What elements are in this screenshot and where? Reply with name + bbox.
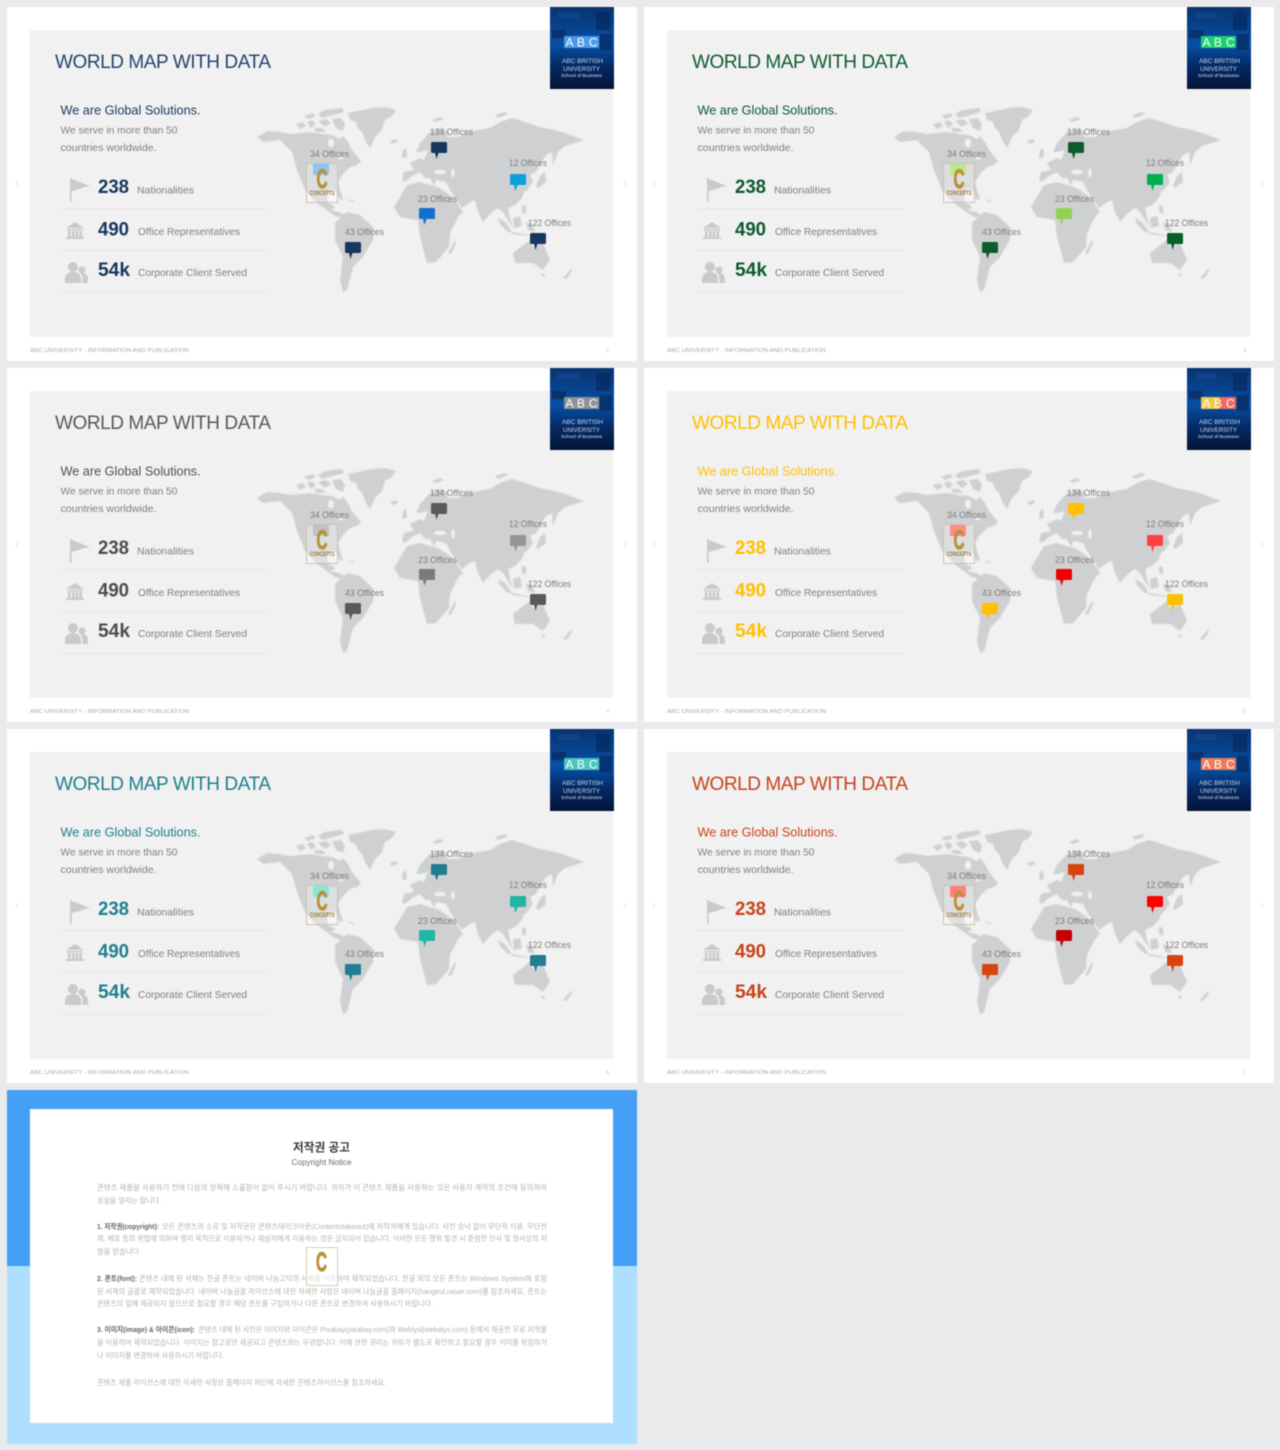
world map: [894, 468, 1221, 653]
description: [60, 486, 178, 515]
stat: nationalities: Nationalities: [137, 546, 194, 558]
stat: office representatives: Office Representatives: [775, 948, 877, 960]
office markers: 34 Offices: [947, 510, 986, 521]
office markers: 12 Offices: [1146, 519, 1184, 530]
stats list: [697, 177, 905, 293]
office markers: 43 Offices: [982, 227, 1021, 238]
stat: nationalities: [98, 899, 194, 920]
description: [60, 846, 178, 876]
cover thumbnail: ABC BRITISH: [1199, 59, 1240, 65]
office markers: 23 Offices: [418, 194, 457, 205]
stat: corporate clients: [98, 260, 247, 281]
stats list: [697, 538, 905, 654]
office markers: 134 Offices: [1067, 127, 1110, 138]
stat: nationalities: 238: [98, 538, 129, 559]
footer: 4: [606, 709, 610, 715]
stat: nationalities: [735, 177, 831, 198]
stat: office representatives: 490: [98, 942, 129, 962]
office markers: 134 Offices: [1067, 849, 1110, 860]
world map: [257, 107, 584, 292]
stat: nationalities: 238: [98, 177, 129, 198]
title: WORLD MAP WITH DATA: [55, 52, 271, 73]
stat: corporate clients: Corporate Client Served: [138, 989, 247, 1001]
watermark: C: [954, 164, 964, 194]
watermark: [306, 1247, 338, 1286]
watermark: CONCEPTS: [310, 191, 334, 197]
office markers: 34 Offices: [310, 871, 349, 882]
copyright heading: Copyright Notice: [292, 1157, 352, 1167]
office markers: 122 Offices: [528, 218, 571, 229]
stat: corporate clients: 54k: [98, 260, 130, 281]
stat: office representatives: [98, 580, 240, 602]
office markers: 134 Offices: [1067, 488, 1110, 499]
footer: 5: [1243, 709, 1246, 715]
footer: [30, 709, 610, 715]
office markers: [947, 127, 1208, 259]
description: countries worldwide.: [60, 503, 156, 515]
office markers: [310, 849, 571, 981]
office markers: 12 Offices: [1146, 880, 1184, 891]
panel: slide 2 green theme: [644, 7, 1274, 361]
stat: nationalities: 238: [735, 899, 766, 920]
office markers: 134 Offices: [430, 488, 473, 499]
stat: office representatives: Office Representatives: [775, 587, 877, 599]
office markers: [310, 488, 571, 620]
cover thumbnail: UNIVERSITY: [1200, 428, 1237, 434]
description: [698, 124, 815, 154]
copyright body text: 재, 배포 등의 위법에 의하여 영리 목적으로 이용하거나 제삼자에게 이용하는 것은 금지되어 있습니다. 이러한 모든 행위 발견 시 준엄한 민사 및 형사상의 처: [97, 1233, 547, 1243]
world map: [257, 468, 584, 653]
cover thumbnail: A B C: [1202, 36, 1235, 50]
office markers: 122 Offices: [528, 940, 571, 951]
subtitle: We are Global Solutions.: [698, 102, 838, 118]
cover thumbnail: A B C: [1202, 758, 1235, 772]
stat: corporate clients: Corporate Client Served: [775, 267, 884, 279]
office markers: 12 Offices: [509, 519, 547, 530]
watermark: CONCEPTS: [310, 913, 334, 919]
stat: nationalities: Nationalities: [137, 906, 194, 918]
cover thumbnail: [550, 368, 614, 450]
stat: corporate clients: 54k: [735, 260, 767, 281]
stats list: [697, 899, 905, 1015]
description: We serve in more than 50: [698, 124, 815, 136]
footer: 7: [1243, 1070, 1246, 1076]
panel: slide 4 yellow theme: [644, 368, 1274, 722]
copyright body text: 콘텐츠 내에 된 서체는 한글 폰트는 네이버 나눔고딕의 서체를 이용하여 제작되었습니다. 한글 외의 모든 폰트는 Windows System에 포함: [139, 1273, 547, 1283]
watermark: C: [316, 1247, 327, 1277]
cover thumbnail: [1187, 729, 1251, 811]
stats list: [60, 538, 268, 654]
cover thumbnail: School of Business: [1198, 795, 1240, 800]
cover thumbnail: School of Business: [561, 434, 603, 439]
stat: office representatives: 490: [735, 580, 766, 602]
description: We serve in more than 50: [60, 846, 178, 858]
cover thumbnail: ABC BRITISH: [562, 420, 603, 426]
stat: office representatives: 490: [98, 580, 129, 602]
watermark: C: [316, 525, 328, 555]
office markers: 34 Offices: [310, 510, 349, 521]
footer: ABC UNIVERSITY - INFORMATION AND PUBLICATION: [30, 348, 189, 354]
title: WORLD MAP WITH DATA: [692, 413, 908, 434]
title: WORLD MAP WITH DATA: [692, 52, 908, 73]
watermark: [306, 524, 338, 564]
footer: ABC UNIVERSITY - INFORMATION AND PUBLICATION: [30, 709, 189, 715]
footer: 6: [606, 1070, 609, 1076]
icon: people: [702, 262, 725, 283]
copyright body text: 3. 이미지(image) & 아이콘(icon):: [97, 1324, 195, 1334]
world map: [894, 107, 1221, 292]
icon: people: [702, 984, 725, 1005]
copyright body text: 모든 콘텐츠의 소유 및 저작권은 콘텐츠테이크아웃(Contentstakeout)에 저작자에게 있습니다. 사전 승낙 없이 무단적 이용, 무단전: [162, 1221, 547, 1231]
copyright body text: 된 서체의 글꼴로 제작되었습니다. 네이버 나눔글꼴 라이선스에 대한 자세한 사항은 네이버 나눔글꼴 홈페이지(hangeul.naver.com)를 참조하세요. 폰트는: [97, 1286, 547, 1296]
subtitle: We are Global Solutions.: [60, 464, 200, 478]
office markers: [310, 127, 571, 259]
description: We serve in more than 50: [60, 124, 178, 136]
subtitle: We are Global Solutions.: [698, 464, 838, 478]
cover thumbnail: School of Business: [1198, 434, 1240, 439]
office markers: 23 Offices: [1055, 916, 1094, 927]
stat: office representatives: [735, 942, 877, 962]
watermark: CONCEPTS: [946, 913, 972, 919]
title: WORLD MAP WITH DATA: [55, 774, 271, 795]
office markers: 12 Offices: [509, 880, 547, 891]
stat: corporate clients: 54k: [98, 621, 130, 642]
watermark: C: [954, 525, 964, 555]
description: We serve in more than 50: [698, 846, 815, 858]
footer: 3: [1243, 348, 1246, 354]
icon: people: [65, 623, 88, 644]
icon: building: [703, 583, 721, 600]
cover thumbnail: A B C: [566, 396, 598, 410]
footer: [667, 348, 1246, 354]
cover thumbnail: A B C: [1202, 396, 1235, 410]
footer: [30, 348, 609, 354]
cover thumbnail: [550, 729, 614, 811]
stat: corporate clients: Corporate Client Served: [138, 628, 247, 640]
office markers: 134 Offices: [430, 849, 473, 860]
office markers: 134 Offices: [430, 127, 473, 138]
icon: flag: [707, 900, 727, 924]
office markers: 43 Offices: [345, 227, 384, 238]
icon: people: [65, 262, 88, 283]
cover thumbnail: A B C: [566, 36, 598, 50]
office markers: 43 Offices: [345, 588, 384, 599]
footer: ABC UNIVERSITY - INFORMATION AND PUBLICATION: [667, 709, 826, 715]
icon: building: [66, 222, 84, 239]
office markers: 23 Offices: [1055, 555, 1094, 566]
description: countries worldwide.: [698, 864, 794, 876]
stat: office representatives: [735, 580, 877, 602]
icon: building: [703, 944, 721, 961]
title: WORLD MAP WITH DATA: [692, 774, 908, 795]
description: countries worldwide.: [60, 864, 156, 876]
copyright heading: 저작권 공고: [293, 1140, 350, 1154]
cover thumbnail: School of Business: [561, 795, 603, 800]
office markers: 122 Offices: [1165, 940, 1208, 951]
icon: building: [703, 222, 721, 239]
copyright body text: 콘텐츠 제품 라이선스에 대한 자세한 사항은 홈페이지 하단에 자세한 콘텐츠라이선스를 참조하세요.: [97, 1377, 386, 1387]
stat: nationalities: [735, 538, 831, 559]
stat: corporate clients: [735, 982, 884, 1003]
cover thumbnail: ABC BRITISH: [1199, 420, 1240, 426]
office markers: 122 Offices: [1165, 218, 1208, 229]
stat: office representatives: [98, 220, 240, 240]
stat: nationalities: [98, 177, 194, 198]
stat: nationalities: [735, 899, 831, 920]
copyright body text: 1. 저작권(copyright):: [97, 1221, 159, 1231]
copyright body text: 을 이용하여 제작되었습니다. 이미지는 참고로만 제공되고 콘텐츠와는 무관합니다. 이에 관한 권리는 귀하가 별도로 확인하고 필요할 경우 이미를 위임하거: [97, 1337, 547, 1347]
icon: people: [702, 623, 725, 644]
stat: office representatives: Office Representatives: [138, 226, 240, 238]
world map: [257, 829, 584, 1014]
office markers: 23 Offices: [418, 916, 457, 927]
copyright body text: 콘텐츠의 일에 제공되지 않으므로 필요할 경우 해당 폰트를 구입하거나 다른 폰트로 변경하여 사용하시기 바랍니다.: [97, 1298, 433, 1308]
footer: [667, 709, 1246, 715]
copyright body text: 2. 폰트(font):: [97, 1274, 137, 1283]
stat: nationalities: Nationalities: [774, 546, 831, 558]
stats list: [60, 177, 268, 293]
cover thumbnail: School of Business: [561, 73, 603, 78]
stat: nationalities: 238: [735, 177, 766, 198]
footer: [667, 1070, 1246, 1076]
office markers: 12 Offices: [1146, 158, 1184, 169]
panel: slide 6 red-orange theme: [644, 729, 1274, 1083]
world map: [894, 829, 1221, 1014]
subtitle: We are Global Solutions.: [60, 102, 200, 118]
panel: copyright notice slide: [7, 1090, 637, 1444]
office markers: 122 Offices: [1165, 579, 1208, 590]
panel: slide 5 teal theme: [7, 729, 637, 1083]
cover thumbnail: UNIVERSITY: [563, 428, 600, 434]
footer: [30, 1070, 609, 1076]
stat: corporate clients: [735, 621, 884, 642]
stat: office representatives: 490: [735, 942, 766, 962]
copyright body text: [97, 1182, 547, 1387]
office markers: [947, 849, 1208, 981]
title: WORLD MAP WITH DATA: [55, 413, 271, 434]
footer: ABC UNIVERSITY - INFORMATION AND PUBLICATION: [667, 1070, 826, 1076]
watermark: C: [316, 886, 328, 916]
stat: corporate clients: 54k: [98, 982, 130, 1003]
copyright body text: 콘텐츠 제품을 사용하기 전에 다음의 항목에 소홀함이 없어 주시기 바랍니다. 귀하가 이 콘텐츠 제품을 사용하는 것은 사용자 계약의 조건에 동의하여: [97, 1182, 547, 1192]
stat: corporate clients: Corporate Client Served: [138, 267, 247, 279]
description: countries worldwide.: [698, 503, 794, 515]
watermark: C: [316, 164, 328, 194]
icon: building: [66, 583, 84, 600]
description: We serve in more than 50: [698, 486, 815, 498]
stat: office representatives: 490: [735, 220, 766, 240]
cover thumbnail: UNIVERSITY: [563, 789, 600, 795]
description: countries worldwide.: [60, 142, 156, 154]
stat: office representatives: Office Representatives: [775, 226, 877, 238]
stat: nationalities: Nationalities: [137, 184, 194, 196]
stat: office representatives: Office Representatives: [138, 587, 240, 599]
icon: flag: [707, 178, 727, 202]
cover thumbnail: UNIVERSITY: [1200, 67, 1237, 73]
copyright body text: 콘텐츠 내에 된 사진은 이미지와 아이콘은 Pixabay(pixabay.com)와 Weblysl(webalys.com) 등에서 제공한 무료 저작물: [198, 1324, 547, 1334]
panel: slide 3 gray theme: [7, 368, 637, 722]
office markers: 12 Offices: [509, 158, 547, 169]
icon: building: [66, 944, 84, 961]
stat: office representatives: [98, 942, 240, 962]
cover thumbnail: UNIVERSITY: [563, 67, 600, 73]
stat: corporate clients: Corporate Client Served: [775, 628, 884, 640]
office markers: 34 Offices: [310, 149, 349, 160]
watermark: CONCEPTS: [946, 191, 972, 197]
subtitle: We are Global Solutions.: [698, 824, 838, 840]
icon: people: [65, 984, 88, 1005]
cover thumbnail: ABC BRITISH: [562, 781, 603, 787]
description: [60, 124, 178, 154]
watermark: [944, 164, 974, 202]
cover thumbnail: [550, 7, 614, 89]
cover thumbnail: [1187, 368, 1251, 450]
cover thumbnail: UNIVERSITY: [1200, 789, 1237, 795]
watermark: C: [954, 886, 964, 916]
watermark: [306, 164, 338, 202]
stat: corporate clients: [98, 621, 247, 642]
icon: flag: [707, 539, 727, 563]
panel: slide 1 navy theme: [7, 7, 637, 361]
footer: ABC UNIVERSITY - INFORMATION AND PUBLICATION: [30, 1070, 189, 1076]
copyright body text: 나 이미지를 변경하여 사용하시기 바랍니다.: [97, 1350, 224, 1360]
stat: corporate clients: 54k: [735, 621, 767, 642]
office markers: 43 Offices: [982, 588, 1021, 599]
watermark: CONCEPTS: [310, 552, 334, 558]
office markers: [947, 488, 1208, 620]
copyright heading: [292, 1140, 352, 1167]
icon: flag: [70, 900, 90, 924]
description: countries worldwide.: [698, 142, 794, 154]
stat: corporate clients: Corporate Client Served: [775, 989, 884, 1001]
stat: nationalities: Nationalities: [774, 906, 831, 918]
cover thumbnail: ABC BRITISH: [562, 59, 603, 65]
subtitle: We are Global Solutions.: [60, 824, 200, 840]
stat: nationalities: 238: [98, 899, 129, 920]
copyright body text: 벌을 받습니다.: [97, 1246, 141, 1256]
footer: 2: [606, 348, 609, 354]
icon: flag: [70, 178, 90, 202]
stat: office representatives: 490: [98, 220, 129, 240]
stat: corporate clients: 54k: [735, 982, 767, 1003]
office markers: 23 Offices: [1055, 194, 1094, 205]
description: [698, 846, 815, 876]
stat: nationalities: Nationalities: [774, 184, 831, 196]
stat: corporate clients: [98, 982, 247, 1003]
cover thumbnail: School of Business: [1198, 73, 1240, 78]
office markers: 43 Offices: [982, 949, 1021, 960]
stats list: [60, 899, 268, 1015]
watermark: [944, 524, 974, 564]
icon: flag: [70, 539, 90, 563]
description: [698, 486, 815, 515]
footer: ABC UNIVERSITY - INFORMATION AND PUBLICATION: [667, 348, 826, 354]
cover thumbnail: A B C: [566, 758, 598, 772]
stat: corporate clients: [735, 260, 884, 281]
description: We serve in more than 50: [60, 486, 178, 498]
watermark: [944, 886, 974, 924]
copyright body text: 성실을 알리는 합니다.: [97, 1195, 161, 1205]
stat: nationalities: 238: [735, 538, 766, 559]
cover thumbnail: [1187, 7, 1251, 89]
office markers: 34 Offices: [947, 871, 986, 882]
office markers: 122 Offices: [528, 579, 571, 590]
office markers: 34 Offices: [947, 149, 986, 160]
cover thumbnail: ABC BRITISH: [1199, 781, 1240, 787]
watermark: CONCEPTS: [946, 552, 972, 558]
stat: office representatives: [735, 220, 877, 240]
watermark: [306, 886, 338, 924]
office markers: 23 Offices: [418, 555, 457, 566]
stat: office representatives: Office Representatives: [138, 948, 240, 960]
office markers: 43 Offices: [345, 949, 384, 960]
stat: nationalities: [98, 538, 194, 559]
